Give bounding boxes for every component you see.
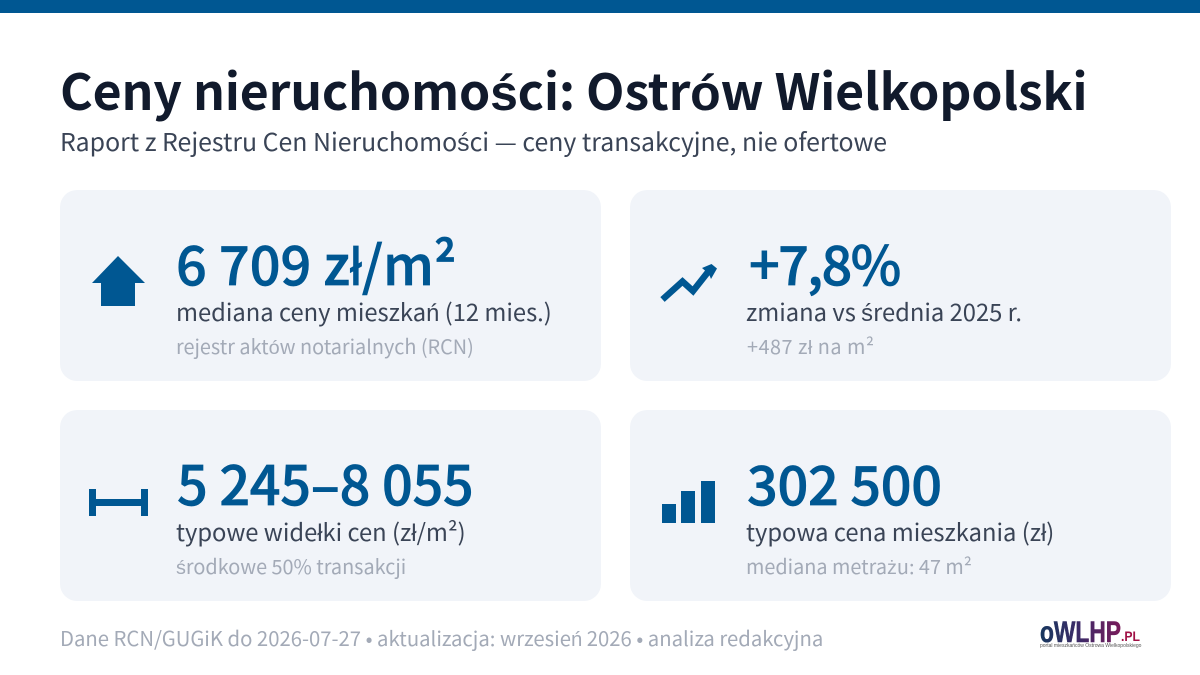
panel: median price xyxy=(60,190,601,381)
footer source: Dane RCN/GUGiK do 2026-07-27 • aktualizacja: wrzesień 2026 • analiza redakcyjna xyxy=(60,622,823,652)
change value: +7,8% xyxy=(749,222,900,301)
logo tagline: portal mieszkańców Ostrowa Wielkopolskiego xyxy=(1040,643,1141,649)
icon: bar chart xyxy=(662,481,715,523)
panel: typical price xyxy=(630,410,1171,601)
median label: mediana ceny mieszkań (12 mies.) xyxy=(176,293,552,328)
range note: środkowe 50% transakcji xyxy=(176,551,406,580)
change label: zmiana vs średnia 2025 r. xyxy=(746,293,1022,328)
panel: change xyxy=(630,190,1171,381)
typical price note: mediana metrażu: 47 m² xyxy=(746,551,972,580)
title: Ceny nieruchomości: Ostrów Wielkopolski xyxy=(60,53,1087,125)
top bar xyxy=(0,0,1200,13)
typical price value: 302 500 xyxy=(747,442,942,521)
change note: +487 zł na m² xyxy=(747,331,875,360)
range label: typowe widełki cen (zł/m²) xyxy=(176,513,466,548)
median value: 6 709 zł/m² xyxy=(176,222,456,301)
typical price label: typowa cena mieszkania (zł) xyxy=(746,513,1054,548)
logo xyxy=(1040,620,1142,649)
panel: price range xyxy=(60,410,601,601)
icon: rising trend arrow xyxy=(660,264,717,302)
icon: house xyxy=(92,256,145,306)
range value: 5 245–8 055 xyxy=(177,442,473,521)
median note: rejestr aktów notarialnych (RCN) xyxy=(176,331,474,360)
subtitle: Raport z Rejestru Cen Nieruchomości — ceny transakcyjne, nie ofertowe xyxy=(60,123,887,159)
icon: range bracket xyxy=(89,489,148,516)
